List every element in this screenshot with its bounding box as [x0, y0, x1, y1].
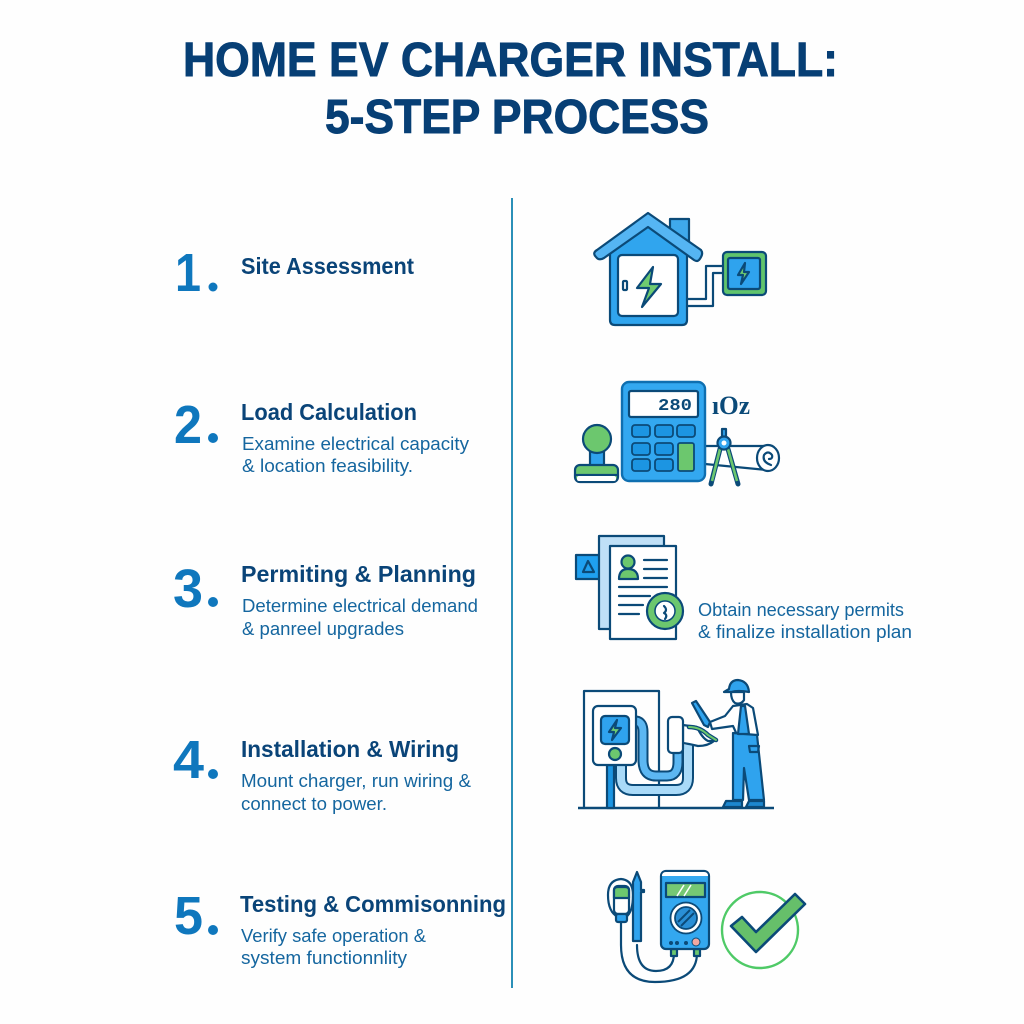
title: 5-STEP PROCESS [325, 91, 709, 144]
step 5: testing and commissioning: Testing & Commisonning [240, 891, 506, 917]
permit caption: Obtain necessary permits [698, 600, 904, 620]
step 3: permitting and planning: 3 [173, 559, 203, 619]
step 2: load calculation: Load Calculation [241, 399, 417, 425]
step 3: permitting and planning: Permiting & Planning [241, 561, 476, 587]
step 4: installation and wiring [173, 730, 471, 814]
step 3: permitting and planning [173, 559, 478, 639]
step 2: load calculation: Examine electrical capacity [242, 434, 469, 454]
title: HOME EV CHARGER INSTALL: [183, 34, 838, 87]
step 4: installation and wiring: Installation & Wiring [241, 736, 459, 762]
permit caption: & finalize installation plan [698, 622, 912, 642]
step 1: site assessment: Site Assessment [241, 253, 414, 279]
icon: house with charger [594, 213, 766, 325]
step 4: installation and wiring: connect to power. [241, 794, 387, 814]
step 2: load calculation: 2 [174, 395, 202, 455]
step 5: testing and commissioning: 5 [174, 886, 203, 946]
icon: calculator, stamp, compass and blueprint [575, 382, 779, 484]
permit caption [698, 600, 912, 642]
icon: permit documents [576, 536, 683, 639]
step 2: load calculation [174, 395, 469, 476]
step 5: testing and commissioning [174, 886, 506, 968]
step 3: permitting and planning: & panreel upgrades [242, 619, 404, 639]
step 2: load calculation: & location feasibility. [242, 456, 413, 476]
step 1: site assessment [175, 243, 414, 303]
step 5: testing and commissioning: system functionnlity [241, 948, 407, 968]
step 3: permitting and planning: Determine electrical demand [242, 596, 478, 616]
step 5: testing and commissioning: Verify safe operation & [241, 926, 426, 946]
icon: calculator, stamp, compass and blueprint: 280 [658, 397, 692, 416]
step 4: installation and wiring: Mount charger, run wiring & [241, 771, 471, 791]
title [183, 34, 838, 144]
icon: technician wiring charger [578, 680, 774, 808]
icon: multimeter and probes [608, 871, 805, 982]
icon: calculator, stamp, compass and blueprint: ıOz [712, 391, 750, 420]
step 1: site assessment: 1 [175, 243, 201, 303]
step 4: installation and wiring: 4 [173, 730, 204, 790]
